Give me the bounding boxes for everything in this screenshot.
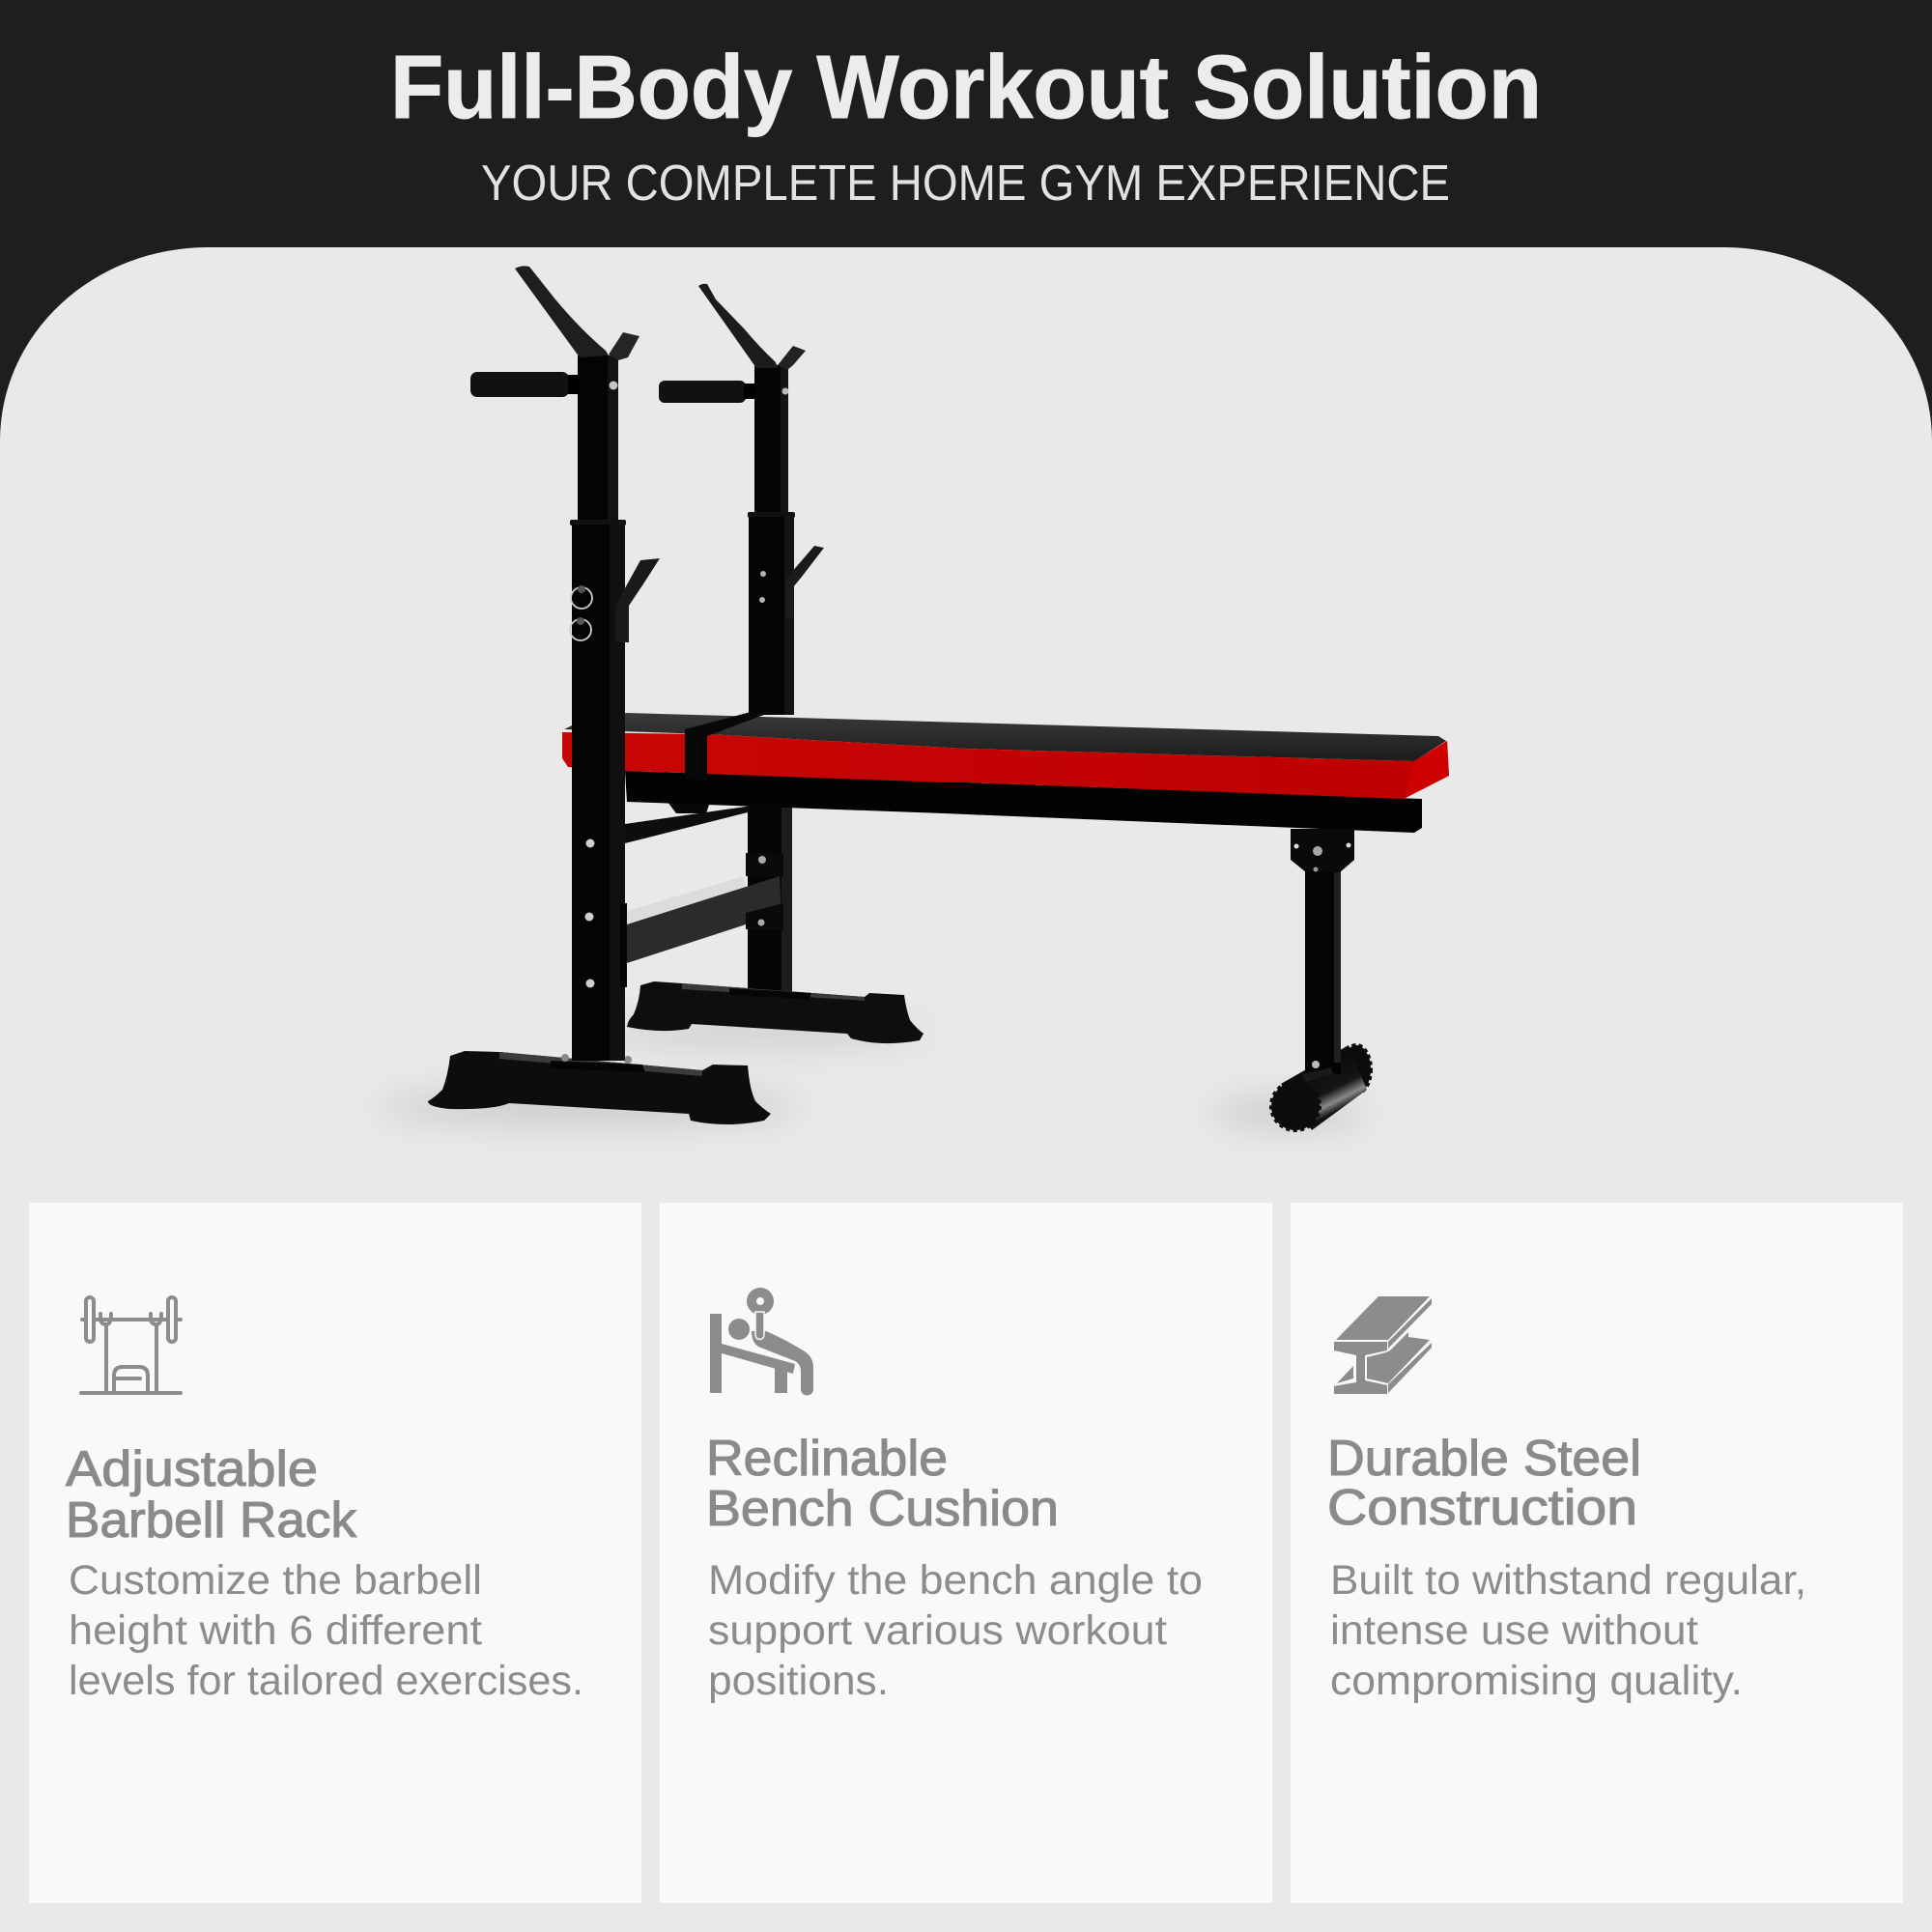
bench frame rail xyxy=(625,771,1422,833)
panel: card 1 xyxy=(29,1203,641,1903)
heading: durable steel construction xyxy=(1327,1431,1641,1536)
description: height with 6 different xyxy=(69,1607,482,1654)
lower brace xyxy=(627,853,783,963)
description: intense use without xyxy=(1330,1607,1698,1654)
header band xyxy=(0,0,1932,444)
heading: adjustable barbell rack xyxy=(66,1441,357,1548)
heading: durable steel construction: Construction xyxy=(1327,1480,1637,1536)
title: Full-Body Workout Solution xyxy=(390,37,1542,137)
front upright xyxy=(470,266,660,1061)
panel: card 2 xyxy=(660,1203,1272,1903)
upper brace xyxy=(625,806,753,843)
description: Built to withstand regular, xyxy=(1330,1557,1806,1604)
description xyxy=(69,1557,583,1704)
heading: reclinable bench cushion: Bench Cushion xyxy=(706,1481,1059,1537)
description: compromising quality. xyxy=(1330,1658,1743,1704)
subtitle: YOUR COMPLETE HOME GYM EXPERIENCE xyxy=(481,156,1450,212)
panel: card 3 xyxy=(1291,1203,1903,1903)
description: Modify the bench angle to xyxy=(708,1557,1203,1604)
heading: adjustable barbell rack: Adjustable xyxy=(66,1441,318,1497)
heading: durable steel construction: Durable Steel xyxy=(1327,1431,1641,1487)
product: weight bench with barbell rack xyxy=(377,266,1449,1130)
heading: reclinable bench cushion: Reclinable xyxy=(706,1431,948,1487)
description xyxy=(1330,1557,1806,1704)
description: Customize the barbell xyxy=(69,1557,482,1604)
description: support various workout xyxy=(708,1607,1167,1654)
description xyxy=(708,1557,1203,1704)
icon: person bench pressing xyxy=(710,1288,813,1395)
icon: barbell rack xyxy=(81,1297,181,1393)
icon: steel I-beam xyxy=(1334,1296,1432,1394)
description: positions. xyxy=(708,1658,889,1704)
heading: reclinable bench cushion xyxy=(706,1431,1059,1537)
rear foot xyxy=(627,981,923,1043)
bench pad: black top xyxy=(564,713,1446,761)
rear upright xyxy=(659,284,824,1005)
bench pad: red side xyxy=(562,732,1449,799)
heading: adjustable barbell rack: Barbell Rack xyxy=(66,1492,357,1548)
leg xyxy=(1271,829,1371,1130)
description: levels for tailored exercises. xyxy=(69,1658,583,1704)
strap xyxy=(685,712,772,781)
front foot xyxy=(428,1051,771,1124)
